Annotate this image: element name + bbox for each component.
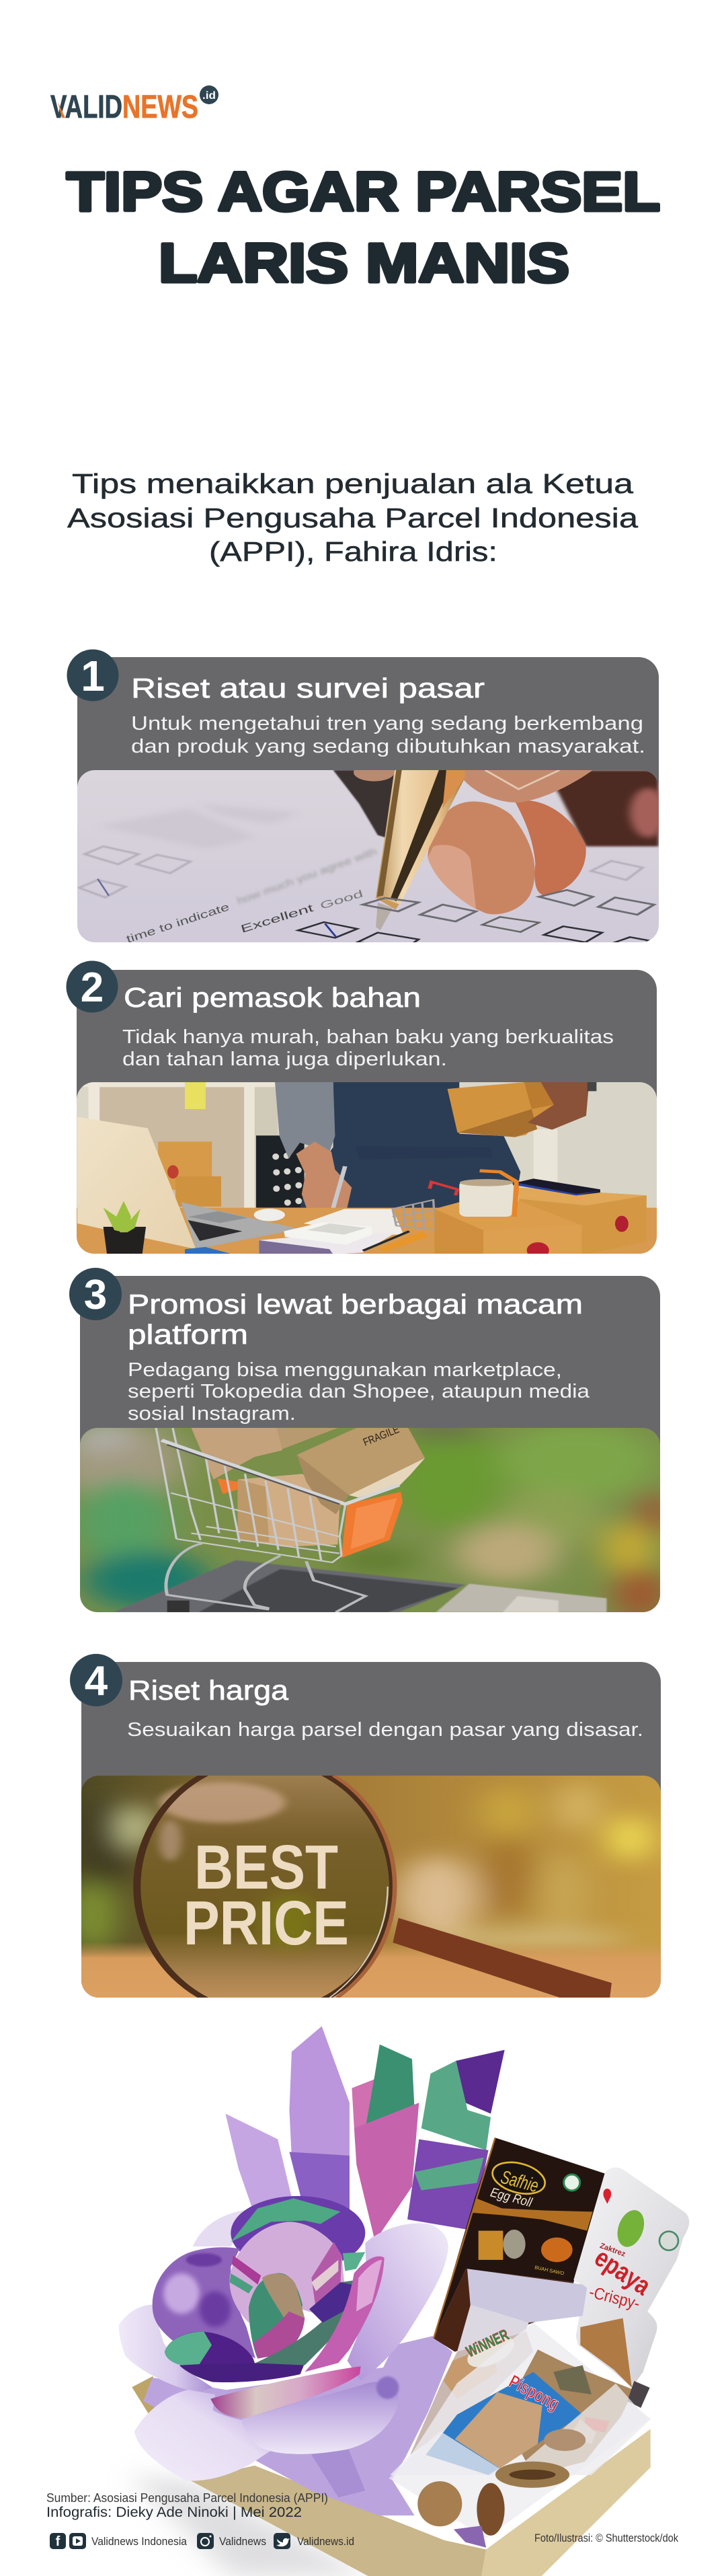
number badge 1 [67,650,118,701]
title: LARIS MANIS [159,233,569,294]
label: Validnews Indonesia: Validnews Indonesia [91,2535,187,2548]
number badge 3: 3 [84,1272,107,1318]
description 1: dan produk yang sedang dibutuhkan masyarakat. [131,736,645,757]
panel: tip 4 riset harga [67,1654,663,2014]
number badge 4 [70,1654,122,1706]
heading 3: Promosi lewat berbagai macam [128,1289,583,1320]
photo: pen ticking a survey form: Good [319,888,364,912]
silver papaya crisps pouch [573,2167,689,2388]
number badge 4: 4 [85,1658,108,1704]
heading 1: Riset atau survei pasar [131,673,485,704]
dark egg roll snack box: Egg Roll [489,2186,534,2210]
intro text: Asosiasi Pengusaha Parcel Indonesia [67,502,638,533]
silver papaya crisps pouch: Zaktrez [599,2242,627,2259]
photo: pen ticking a survey form: how much you agree with [236,846,378,907]
description 3: Pedagang bisa menggunakan marketplace, [128,1359,562,1381]
label: Validnews: Validnews [219,2535,266,2548]
heading 3: platform [128,1319,248,1350]
description 3: seperti Tokopedia dan Shopee, ataupun media [128,1381,590,1402]
icon: instagram [197,2533,214,2549]
logo: Validnews.id: .id [202,90,216,102]
description 1 [131,713,645,757]
clear snack bags with labels: WiNNER [463,2326,512,2360]
banana chips in lower bag [389,2384,648,2548]
title [67,161,660,294]
credit: sumber: Sumber: Asosiasi Pengusaha Parcel Indonesia (APPI) [46,2491,328,2505]
intro text: Tips menaikkan penjualan ala Ketua [72,468,633,499]
photo: pen ticking a survey form [77,763,667,947]
silver papaya crisps pouch: -Crispy- [588,2283,641,2313]
number badge 2 [66,960,118,1013]
photo: pen ticking a survey form: Excellent [239,903,315,936]
icon: facebook: f [56,2534,61,2549]
panel: tip 1 riset atau survei pasar [67,650,667,947]
label: Validnews.id: Validnews.id [297,2535,354,2548]
photo: magnifying glass showing best price [81,1776,661,1998]
photo: magnifying glass showing best price: BEST [194,1832,338,1902]
heading 4: Riset harga [128,1675,288,1706]
dark egg roll snack box [434,2137,605,2352]
logo: Validnews.id [50,85,218,125]
dark egg roll snack box: Safhie [499,2166,541,2196]
intro text [67,468,638,567]
dark egg roll snack box: BUAH SAWO [534,2264,565,2277]
number badge 1: 1 [81,652,105,700]
icon: facebook [50,2533,66,2549]
heading 2: Cari pemasok bahan [124,982,421,1013]
description 4: Sesuaikan harga parsel dengan pasar yang disasar. [127,1719,643,1741]
description 2: Tidak hanya murah, bahan baku yang berkualitas [122,1026,614,1048]
heading 3 [128,1289,583,1350]
description 3: sosial Instagram. [128,1403,296,1425]
box and rolled cloth napkins [130,2026,651,2576]
description 2: dan tahan lama juga diperlukan. [122,1049,447,1070]
clear snack bags with labels [390,2269,651,2475]
title: TIPS AGAR PARSEL [67,161,660,223]
panel: tip 3 promosi lewat berbagai macam platform [58,1268,674,1621]
illustration: parcel gift box with purple cloth flower and snacks [119,2026,689,2576]
description 3 [128,1359,590,1425]
photo: miniature shopping cart with boxes on a laptop [80,1428,660,1612]
number badge 3 [69,1268,122,1320]
logo: Validnews.id: NEWS [122,89,198,125]
photo: seller packing boxes at a desk [75,1082,661,1258]
photo: miniature shopping cart with boxes on a laptop: FRAGILE [362,1424,401,1449]
logo: Validnews.id: VALID [50,89,122,125]
photo: pen ticking a survey form: time to indicate [125,901,231,946]
credit: infografis: Infografis: Dieky Ade Ninoki | Mei 2022 [46,2505,302,2520]
photo: magnifying glass showing best price: PRICE [184,1888,349,1958]
intro text: (APPI), Fahira Idris: [209,536,497,567]
silver papaya crisps pouch: epaya [590,2242,657,2302]
number badge 2: 2 [81,964,104,1011]
panel: tip 2 cari pemasok bahan [66,960,661,1258]
credit: foto: Foto/Ilustrasi: © Shutterstock/dok [534,2532,678,2544]
description 1: Untuk mengetahui tren yang sedang berkembang [131,713,643,734]
icon: youtube [69,2533,86,2549]
cloth flower [119,2196,452,2515]
description 2 [122,1026,614,1070]
clear snack bags with labels: Pispong [506,2371,563,2414]
icon: twitter [274,2533,290,2549]
